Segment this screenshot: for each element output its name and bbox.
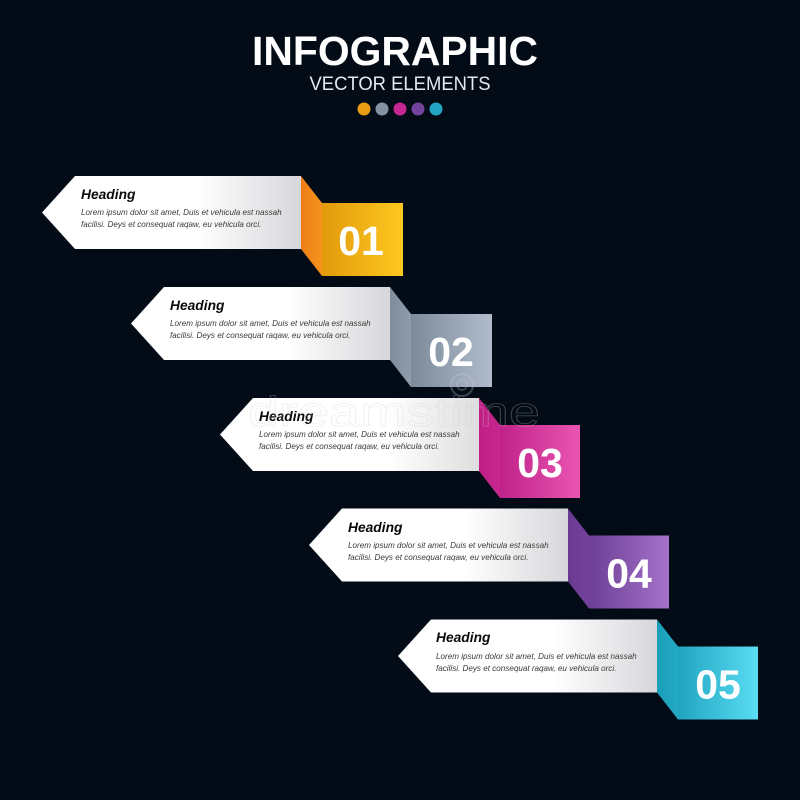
colour dots [358, 102, 442, 116]
step 2 fold [390, 287, 411, 387]
step 1 heading: Heading [81, 187, 136, 202]
step 5 body text: facilisi. Deys et consequat raqaw, eu vehicula orci. [436, 664, 616, 673]
step 2 heading: Heading [170, 298, 225, 313]
step 5 heading: Heading [436, 630, 491, 645]
step 4 fold [568, 508, 589, 608]
step 5 number: 05 [695, 662, 741, 708]
step 2 body text: Lorem ipsum dolor sit amet, Duis et vehicula est nassah [170, 319, 371, 328]
watermark: dreamstime [248, 388, 540, 435]
step 2 body text: facilisi. Deys et consequat raqaw, eu vehicula orci. [170, 331, 350, 340]
step 3 body text: facilisi. Deys et consequat raqaw, eu vehicula orci. [259, 442, 439, 451]
step 1 number box [322, 203, 403, 276]
watermark [248, 374, 540, 435]
step 4 [309, 508, 669, 608]
step 4 body text: facilisi. Deys et consequat raqaw, eu vehicula orci. [348, 553, 528, 562]
step 5 fold [657, 620, 678, 720]
step 4 number box [589, 536, 669, 608]
step 1 [42, 176, 403, 276]
step 1 body text: facilisi. Deys et consequat raqaw, eu vehicula orci. [81, 220, 261, 229]
step 1 body text: Lorem ipsum dolor sit amet, Duis et vehicula est nassah [81, 208, 282, 217]
step 5 number box [678, 646, 758, 720]
step 2 number box [411, 314, 492, 387]
step 4 number: 04 [606, 550, 652, 596]
subtitle: VECTOR ELEMENTS [310, 73, 490, 95]
step 4 body text: Lorem ipsum dolor sit amet, Duis et vehicula est nassah [348, 541, 549, 550]
step 2 [131, 287, 492, 387]
step 5 [398, 620, 758, 720]
step 1 number: 01 [338, 218, 384, 264]
step 2 arrow panel [131, 287, 390, 360]
step 3 [220, 398, 580, 498]
step 3 heading: Heading [259, 409, 314, 424]
step 4 arrow panel [309, 508, 568, 582]
step 3 number: 03 [517, 440, 563, 486]
step 3 number box [500, 425, 580, 498]
step 4 heading: Heading [348, 520, 403, 535]
step 2 number: 02 [428, 329, 474, 375]
step 3 fold [479, 398, 500, 498]
step 1 arrow panel [42, 176, 301, 249]
step 5 body text: Lorem ipsum dolor sit amet, Duis et vehicula est nassah [436, 652, 637, 661]
step 1 fold [301, 176, 322, 276]
step 3 arrow panel [220, 398, 479, 471]
step 5 arrow panel [398, 620, 657, 692]
title: INFOGRAPHIC [252, 28, 538, 74]
step 3 body text: Lorem ipsum dolor sit amet, Duis et vehicula est nassah [259, 430, 460, 439]
